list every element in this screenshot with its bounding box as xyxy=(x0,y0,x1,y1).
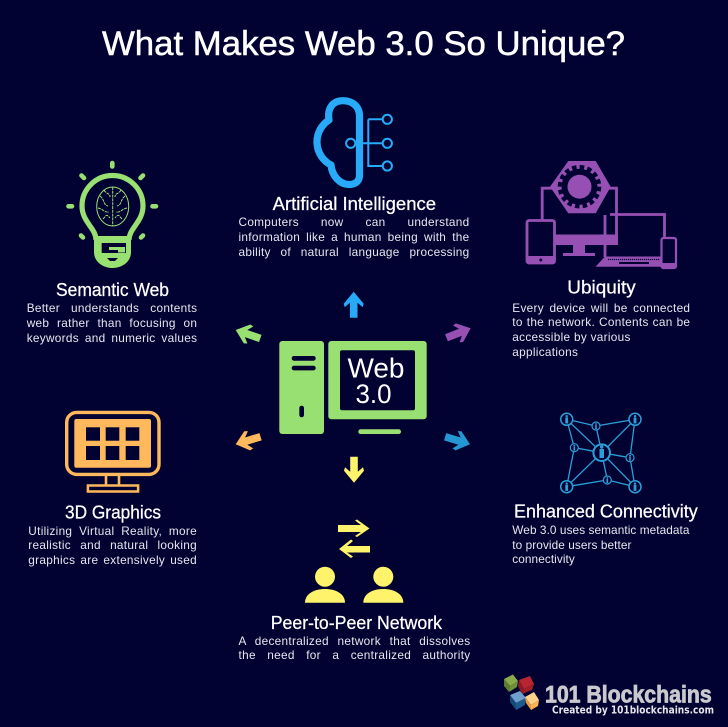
heading: 3D Graphics xyxy=(65,502,161,522)
body text: ability of natural language processing xyxy=(238,245,470,259)
body text: to provide users better xyxy=(512,538,632,552)
logo: 101 Blockchains xyxy=(504,674,714,716)
panel: enhanced connectivity xyxy=(512,412,698,566)
body text: Computers now can understand xyxy=(238,215,470,229)
body text xyxy=(26,301,197,345)
heading: Enhanced Connectivity xyxy=(514,501,698,521)
body text xyxy=(238,215,470,259)
icon: computer xyxy=(279,341,427,434)
body text: accessible by various xyxy=(512,330,631,344)
heading: Peer-to-Peer Network xyxy=(271,613,443,633)
body text: Every device will be connected xyxy=(512,300,690,314)
body text: the need for a centralized authority xyxy=(238,648,470,662)
icon: four cubes xyxy=(504,674,539,710)
body text: A decentralized network that dissolves xyxy=(238,634,470,648)
heading: Artificial Intelligence xyxy=(273,194,436,214)
icon: computer: 3.0 xyxy=(356,379,392,409)
body text: Web 3.0 uses semantic metadata xyxy=(512,523,690,537)
icon: monitor with grid xyxy=(67,412,159,492)
body text: connectivity xyxy=(512,552,575,566)
arrow: to enhanced connectivity xyxy=(442,427,473,454)
body text: information like a human being with the xyxy=(238,230,470,244)
panel: artificial intelligence xyxy=(238,97,470,259)
icon: network of people xyxy=(561,413,641,493)
icon: connected devices with gear xyxy=(527,161,676,268)
body text: web rather than focusing on xyxy=(27,316,197,330)
logo wordmark: 101 Blockchains xyxy=(545,681,712,708)
panel: 3d graphics xyxy=(28,410,197,567)
arrow: up to artificial intelligence xyxy=(344,292,364,318)
body text: to the network. Contents can be xyxy=(512,315,690,329)
panel: semantic web xyxy=(26,160,197,345)
body text xyxy=(238,634,470,662)
panel: peer-to-peer network xyxy=(238,520,470,662)
panel: ubiquity xyxy=(512,161,690,359)
body text xyxy=(512,300,690,359)
body text: graphics are extensively used xyxy=(28,553,197,567)
body text xyxy=(512,523,690,566)
heading: Ubiquity xyxy=(567,277,636,297)
panel: central web 3.0 computer with arrows xyxy=(236,292,471,483)
icon: cloud brain circuit xyxy=(317,101,392,184)
body text: keywords and numeric values xyxy=(27,331,197,345)
body text: Better understands contents xyxy=(27,301,197,315)
title: What Makes Web 3.0 So Unique? xyxy=(102,25,625,63)
icon: light bulb with brain xyxy=(68,163,156,268)
body text: applications xyxy=(512,345,578,359)
arrow: to ubiquity xyxy=(443,319,474,347)
icon: exchange arrows and two people xyxy=(305,520,403,603)
body text xyxy=(28,524,197,567)
body text: realistic and natural looking xyxy=(28,538,197,552)
arrow: to 3d graphics xyxy=(233,427,263,454)
heading: Semantic Web xyxy=(56,280,169,300)
icon: computer: Web xyxy=(348,353,404,384)
arrow: to semantic web xyxy=(232,321,264,348)
arrow: to peer-to-peer network xyxy=(344,457,364,483)
body text: Utilizing Virtual Reality, more xyxy=(28,524,197,538)
